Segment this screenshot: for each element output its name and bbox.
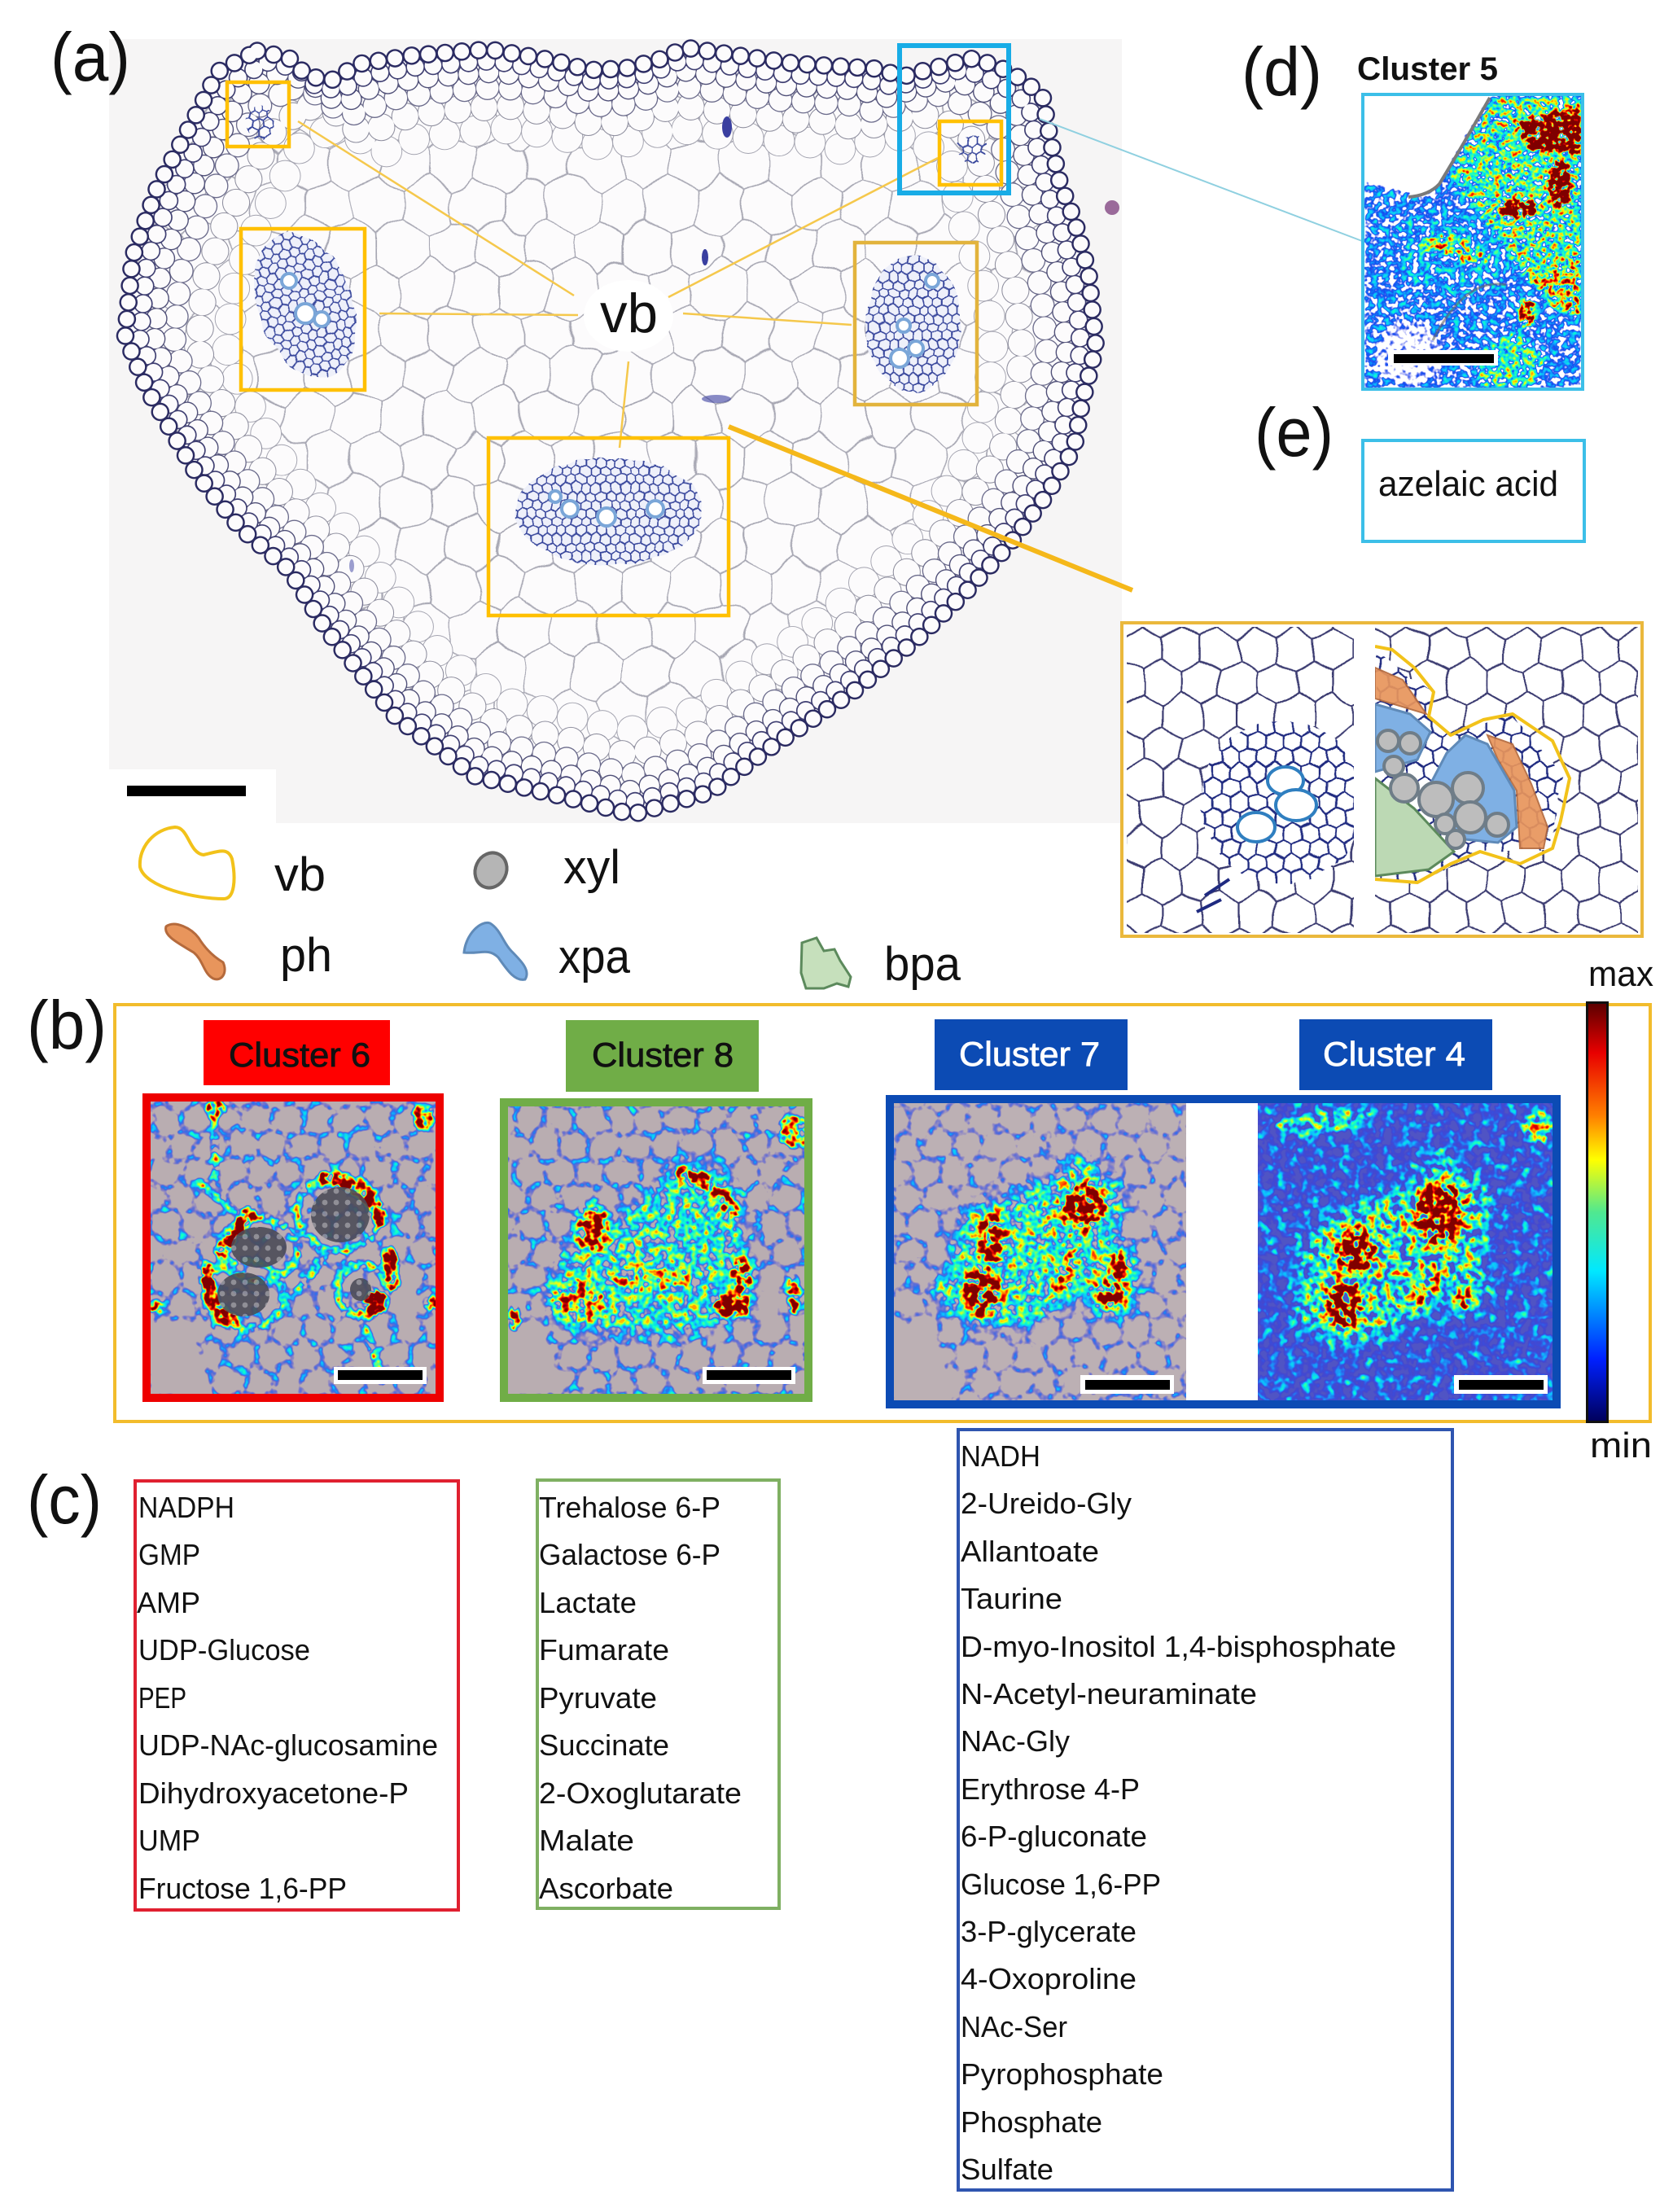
legend: ph <box>166 924 332 982</box>
cluster 5 title: Cluster 5 <box>1357 51 1498 87</box>
legend: xpa: xpa <box>558 931 631 983</box>
scale bar patch <box>109 769 276 823</box>
region: xylem parenchyma <box>1375 704 1517 843</box>
cluster 8 tag: Cluster 8 <box>592 1036 734 1074</box>
panel label a: (a) <box>50 19 130 95</box>
legend: vb <box>140 827 326 901</box>
inset right annotated micrograph <box>1375 627 1638 933</box>
stain marks <box>349 116 1119 572</box>
list: cluster 8 metabolites <box>537 1480 779 1908</box>
list: cluster 6 metabolites: Fructose 1,6-PP <box>138 1872 347 1905</box>
panel d label: (d) <box>1242 33 1322 110</box>
list: cluster 7 and 4 metabolites: NAc-Gly <box>961 1724 1070 1758</box>
panel b label: (b) <box>27 987 107 1063</box>
tissue cross-section <box>91 24 1130 839</box>
colour bar min label: min <box>1590 1426 1652 1465</box>
list: cluster 7 and 4 metabolites: Phosphate <box>961 2105 1102 2139</box>
list: cluster 7 and 4 metabolites: Erythrose 4-P <box>961 1772 1140 1806</box>
panel a: stem cross-section <box>91 24 1362 839</box>
list: cluster 8 metabolites: Pyruvate <box>539 1681 657 1715</box>
list: cluster 6 metabolites: GMP <box>138 1538 200 1571</box>
legend <box>140 827 961 991</box>
panel b: heatmap container <box>115 1005 1650 1421</box>
list: cluster 7 and 4 metabolites: NAc-Ser <box>961 2010 1067 2043</box>
list: cluster 8 metabolites: Succinate <box>539 1728 669 1762</box>
list: cluster 7 and 4 metabolites <box>958 1430 1452 2190</box>
list: cluster 7 and 4 metabolites: Allantoate <box>961 1535 1099 1568</box>
cell zone inside bundle <box>1375 651 1563 883</box>
micrograph background <box>109 39 1122 823</box>
connector lines <box>298 121 938 448</box>
cluster 8 tag <box>566 1020 759 1092</box>
thick pointer to inset <box>729 427 1132 590</box>
panel c label: (c) <box>27 1461 102 1538</box>
scale bar cluster 7 <box>1080 1375 1174 1394</box>
legend: vb: vb <box>274 848 326 901</box>
panel e: azelaic acid box <box>1363 440 1584 541</box>
list: cluster 8 metabolites: Trehalose 6-P <box>539 1491 720 1524</box>
list: cluster 8 metabolites: 2-Oxoglutarate <box>539 1776 742 1810</box>
colour bar <box>1588 1003 1607 1421</box>
cluster 4 tag: Cluster 4 <box>1323 1035 1465 1073</box>
list: cluster 7 and 4 metabolites: 2-Ureido-Gly <box>961 1487 1132 1520</box>
colour bar max label: max <box>1588 954 1653 994</box>
xylem vessels <box>1377 730 1509 848</box>
panel e label: (e) <box>1255 394 1334 471</box>
list: cluster 7 and 4 metabolites: Sulfate <box>961 2153 1053 2186</box>
legend: ph: ph <box>280 929 332 982</box>
list: cluster 7 and 4 metabolites: 3-P-glycerate <box>961 1915 1137 1948</box>
panel d: cluster 5 heatmap <box>1363 94 1583 389</box>
cluster 6 tag: Cluster 6 <box>229 1036 370 1074</box>
vascular bundle outline <box>1375 646 1570 883</box>
list: cluster 8 metabolites: Malate <box>539 1824 634 1857</box>
list: cluster 7 and 4 metabolites: Taurine <box>961 1582 1062 1615</box>
list: cluster 7 and 4 metabolites: N-Acetyl-neuraminate <box>961 1677 1257 1710</box>
white cell behind vb label <box>584 280 673 352</box>
panel e: azelaic acid box: azelaic acid <box>1378 464 1558 504</box>
list: cluster 8 metabolites: Galactose 6-P <box>539 1538 720 1571</box>
cluster 8 heatmap <box>497 1095 818 1404</box>
cluster 4 image <box>1258 1103 1553 1400</box>
list: cluster 8 metabolites: Lactate <box>539 1586 637 1619</box>
list: cluster 6 metabolites <box>135 1481 458 1910</box>
list: cluster 6 metabolites: UDP-NAc-glucosamine <box>138 1728 438 1762</box>
vb label: vb <box>600 283 658 344</box>
list: cluster 8 metabolites: Fumarate <box>539 1633 669 1667</box>
scale bar <box>1388 350 1498 366</box>
cluster 6 tag <box>204 1020 390 1085</box>
vascular bundle highlight boxes <box>227 82 1001 615</box>
cluster 7 tag: Cluster 7 <box>959 1035 1100 1073</box>
legend: bpa <box>801 938 961 991</box>
scale bar <box>127 786 246 796</box>
scale bar cluster 4 <box>1454 1375 1548 1394</box>
list: cluster 7 and 4 metabolites: 6-P-gluconate <box>961 1820 1147 1853</box>
list: cluster 6 metabolites: UMP <box>138 1824 200 1857</box>
scale bar <box>334 1367 427 1384</box>
list: cluster 6 metabolites: UDP-Glucose <box>138 1633 310 1667</box>
inset left micrograph <box>1127 627 1354 933</box>
cluster 7 tag <box>935 1019 1128 1090</box>
list: cluster 7 and 4 metabolites: Glucose 1,6-PP <box>961 1868 1161 1901</box>
list: cluster 6 metabolites: AMP <box>137 1586 200 1619</box>
list: cluster 7 and 4 metabolites: D-myo-Inositol 1,4-bisphosphate <box>961 1630 1396 1663</box>
list: cluster 6 metabolites: NADPH <box>138 1491 234 1524</box>
list: cluster 7 and 4 metabolites: 4-Oxoproline <box>961 1962 1137 1995</box>
legend: xyl <box>469 841 620 894</box>
list: cluster 6 metabolites: PEP <box>138 1681 186 1715</box>
list: cluster 6 metabolites: Dihydroxyacetone-P <box>138 1776 409 1810</box>
list: cluster 7 and 4 metabolites: NADH <box>961 1439 1040 1473</box>
legend: xpa <box>464 922 631 983</box>
list: cluster 7 and 4 metabolites: Pyrophosphate <box>961 2057 1163 2091</box>
thin pointer to panel d <box>1040 119 1362 241</box>
cluster 7 heatmap <box>883 1091 1563 1413</box>
cluster 5 region box <box>900 46 1009 193</box>
vascular bundles <box>235 104 988 565</box>
legend: bpa: bpa <box>884 938 961 991</box>
list: cluster 8 metabolites: Ascorbate <box>539 1872 673 1905</box>
inset: vascular bundle detail <box>1115 619 1645 944</box>
region: phloem <box>1375 668 1548 848</box>
cluster 6 heatmap <box>138 1091 448 1404</box>
region: bundle parenchyma <box>1375 778 1454 876</box>
cluster 4 tag <box>1299 1019 1492 1090</box>
scale bar <box>703 1367 795 1384</box>
legend: xyl: xyl <box>563 841 620 894</box>
